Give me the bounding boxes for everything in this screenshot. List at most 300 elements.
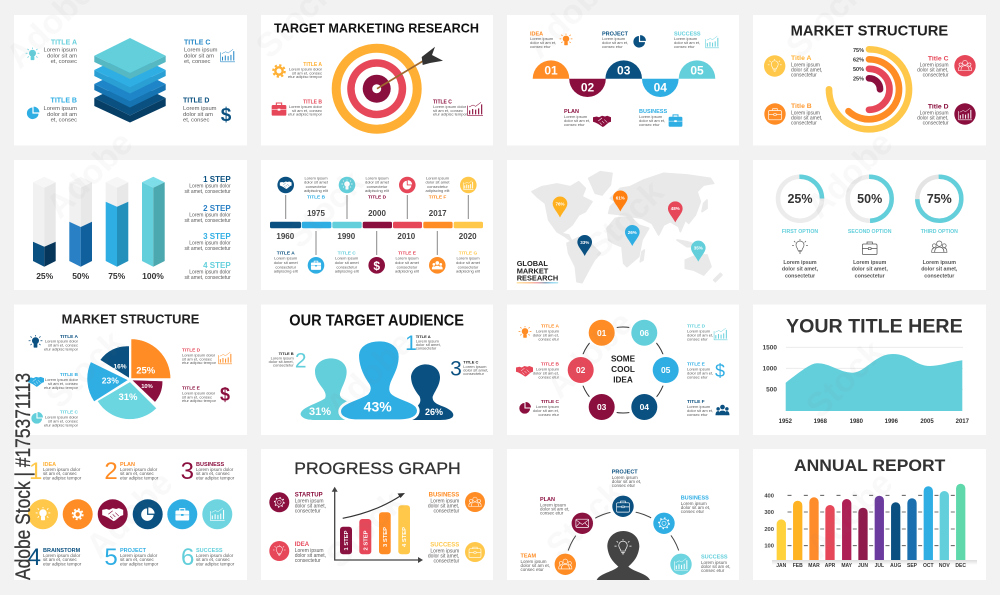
text: title G: Lorem ipsum <box>456 256 480 261</box>
step 4: 4 STEP <box>203 261 231 270</box>
text: title A: dolor sit amet <box>274 260 299 265</box>
panel: idea head arc <box>507 449 739 580</box>
cycle nodes: 06 <box>640 328 649 338</box>
label: team: dolor sit am et, <box>520 563 550 568</box>
label: business: consectetur <box>433 508 460 514</box>
label: idea: consectetur <box>295 558 321 564</box>
label: success: SUCCESS <box>430 542 459 548</box>
step 1 <box>185 175 231 195</box>
item 4 <box>28 544 82 571</box>
label: team <box>520 554 550 572</box>
label: title B <box>288 100 323 116</box>
text: title F <box>425 176 450 201</box>
y axis labels: 100 <box>764 544 774 550</box>
text: title A: TITLE A <box>277 251 295 257</box>
pie values: 23% <box>102 376 119 386</box>
text: title E: adipiscing elit <box>395 269 420 274</box>
label: title E <box>687 362 713 380</box>
isometric layer stack <box>94 38 166 122</box>
text: Stock <box>799 333 891 426</box>
label: title B: Lorem ipsum <box>791 110 820 116</box>
item 1: 1 <box>29 458 42 485</box>
text: title B: TITLE B <box>307 195 326 201</box>
label: title F: Lorem ipsum <box>687 404 711 409</box>
item 6 <box>181 544 235 571</box>
icon: chart <box>219 352 232 364</box>
label: title C: dolor sit am et, <box>533 408 559 413</box>
label: success: Lorem ipsum <box>701 560 727 565</box>
left labels: title A and B: TITLE B <box>51 98 77 104</box>
label: idea: IDEA <box>295 542 310 548</box>
icon: dollar: $ <box>715 361 725 381</box>
pie values: 31% <box>118 392 138 403</box>
label: title B: consec etur <box>538 374 560 380</box>
label: title A <box>791 55 822 78</box>
panel: percentage options <box>753 160 986 290</box>
icon: pie <box>633 35 646 48</box>
target rings <box>332 44 422 134</box>
icon circles top <box>277 177 477 193</box>
label: title D: Lorem ipsum <box>920 110 948 116</box>
panel: five-step wave <box>507 15 739 146</box>
text: Adobe <box>539 304 640 406</box>
left labels: title A and B: TITLE A <box>51 40 77 46</box>
left labels: title A and B <box>43 40 77 124</box>
panel: timeline <box>261 160 493 290</box>
label: business: dolor sit am et, <box>681 505 710 510</box>
step 3 <box>185 232 231 252</box>
donut 50% <box>848 177 892 221</box>
step 1: 1 STEP <box>203 175 231 184</box>
label: plan: consec etur <box>540 510 564 516</box>
panel: six numbered circles <box>14 449 247 580</box>
label: title B: consectetur <box>273 363 294 368</box>
percent labels <box>36 271 164 281</box>
label: title C: etur adipisc tempor <box>44 422 79 428</box>
label: success: Lorem ipsum <box>674 36 698 41</box>
item 1: Lorem ipsum dolor <box>43 467 81 472</box>
month labels: DEC <box>955 563 966 569</box>
label: business: dolor sit amet, <box>428 504 459 510</box>
label: success: consec etur <box>674 44 695 49</box>
donut 50%: 50% <box>857 192 882 206</box>
icon: gear <box>273 65 285 77</box>
label: business: Lorem ipsum <box>681 501 707 506</box>
label: title A: Title A <box>791 55 811 62</box>
text: Adobe <box>799 464 900 566</box>
connecting arc <box>565 511 682 565</box>
option descriptions: dolor sit amet, <box>852 267 888 273</box>
item 5: etur adipisc tempor <box>120 561 159 566</box>
bar: 75% <box>106 177 128 267</box>
option descriptions: dolor sit amet, <box>921 267 958 273</box>
label: title E: sit am et, consec <box>182 394 212 399</box>
pie values: 25% <box>136 366 156 376</box>
item 2 <box>104 458 159 485</box>
month labels <box>776 563 966 569</box>
label: title C: consectetur <box>463 371 485 376</box>
step 2: Lorem ipsum dolor <box>189 212 231 218</box>
option labels: FIRST OPTION <box>782 229 818 235</box>
item 6: SUCCESS <box>196 548 223 554</box>
label: business: Lorem ipsum <box>639 114 663 119</box>
label: title A: dolor sit am et, <box>533 332 559 338</box>
years: 2017 <box>429 209 447 218</box>
label: title C: etur adipisc tempor <box>433 112 468 116</box>
percent labels: 50% <box>72 271 90 281</box>
right labels: title C and D: Lorem ipsum <box>183 106 217 112</box>
label: title C: dolor sit amet, <box>463 368 488 372</box>
bar: 25% <box>33 177 56 267</box>
month labels: MAR <box>808 563 820 569</box>
icon: bulb <box>519 326 531 338</box>
item 3: sit am et, consec <box>196 471 231 476</box>
step bars <box>340 505 410 554</box>
label: title E: consec etur <box>687 374 708 380</box>
arrow in target <box>377 47 443 89</box>
label: project: PROJECT <box>602 31 629 37</box>
cycle nodes: 04 <box>640 402 649 412</box>
icon: dollar: $ <box>221 105 232 126</box>
pie values: 10% <box>141 384 153 390</box>
label: project: consec etur <box>612 483 635 488</box>
x axis labels: 1980 <box>850 419 864 425</box>
label: title C <box>533 399 560 417</box>
title: ANNUAL REPORT <box>794 457 945 475</box>
node: project <box>609 492 637 520</box>
years: 2010 <box>397 232 416 241</box>
panel: area chart <box>753 304 986 435</box>
text: title A: adipiscing elit <box>274 269 299 274</box>
step 2: 2 STEP <box>203 204 231 213</box>
numeral 3: 3 <box>450 358 462 380</box>
radial arcs <box>829 49 909 129</box>
label: success <box>428 542 460 564</box>
text: title F: adipiscing elit <box>425 188 450 193</box>
label: title D <box>917 104 949 126</box>
monthly bars <box>777 484 965 560</box>
label: title E <box>182 386 217 403</box>
label: title C: TITLE C <box>541 399 560 405</box>
text: Stock <box>39 323 131 416</box>
label: idea: consec etur <box>530 44 551 49</box>
panel: our target audience <box>261 304 493 435</box>
label: title A: sit am et, consec <box>292 70 322 75</box>
item 5: 5 <box>104 544 118 571</box>
label: success: consec etur <box>701 568 725 573</box>
bar: 50% <box>69 177 92 267</box>
item 1: sit am et, consec <box>43 471 78 476</box>
label: plan: Lorem ipsum <box>564 114 588 119</box>
axes <box>332 487 423 563</box>
label: success: consectetur <box>433 558 460 564</box>
map pins: 76% <box>555 201 565 206</box>
timeline bar <box>270 222 483 228</box>
title: OUR TARGET AUDIENCE <box>289 313 464 330</box>
step bars: 4 STEP <box>402 527 408 547</box>
label: business: BUSINESS <box>639 109 667 115</box>
label: title A: consectetur <box>791 72 817 78</box>
text: Adobe <box>79 464 180 566</box>
icon circles row <box>28 499 232 529</box>
icon: case circle <box>764 103 786 125</box>
label: title D: consec etur <box>687 336 708 342</box>
label: idea: dolor sit amet, <box>295 553 326 559</box>
bar: 100% <box>142 177 165 267</box>
label: title B <box>44 372 79 390</box>
label: plan: dolor sit am et, <box>540 506 570 512</box>
center label: IDEA <box>613 376 633 384</box>
cycle nodes: 01 <box>597 328 607 338</box>
label: success: SUCCESS <box>701 554 728 560</box>
audience percentages: 43% <box>364 398 392 414</box>
right labels: title C and D: TITLE C <box>184 40 210 46</box>
years: 1960 <box>276 232 295 241</box>
step 4 <box>185 261 231 281</box>
text: Stock <box>579 173 671 266</box>
step bars: 1 STEP <box>344 530 350 550</box>
text: title A: consectetur <box>275 264 297 269</box>
label: title F: consec etur <box>687 412 708 417</box>
label: title A: dolor sit amet, <box>791 68 822 74</box>
label: title C: Lorem ipsum <box>463 364 487 369</box>
icon: briefcase <box>272 103 286 116</box>
pie chart <box>87 339 171 419</box>
option descriptions: consectetur <box>785 273 815 279</box>
node: success <box>667 550 695 578</box>
label: success: SUCCESS <box>674 31 701 37</box>
text: title B <box>304 176 329 201</box>
y axis labels: 400 <box>764 493 774 499</box>
item 5: PROJECT <box>120 548 147 554</box>
item 3: etur adipisc tempor <box>196 475 235 480</box>
icon: pie <box>519 402 531 414</box>
growth arrow <box>343 493 405 518</box>
label: title B: sit am et, consec <box>292 108 322 113</box>
label: title E: etur adipisc tempor <box>182 398 217 403</box>
text: title D <box>365 176 390 201</box>
label: title A: Lorem ipsum <box>791 62 820 68</box>
text: title F: dolor sit amet <box>425 180 450 185</box>
label: title B: Lorem ipsum <box>271 355 294 360</box>
label: project: Lorem ipsum <box>602 36 626 41</box>
label: business: consec etur <box>639 122 660 127</box>
left labels: title A and B: Lorem ipsum <box>43 106 77 112</box>
node: team <box>551 550 579 578</box>
grid lines <box>786 347 963 389</box>
text: title D: adipiscing elit <box>365 188 390 193</box>
label: title F <box>687 399 713 417</box>
label: title B: Lorem ipsum dolor <box>45 377 79 382</box>
label: title C: consec etur <box>538 412 560 417</box>
text: title D: TITLE D <box>368 195 387 201</box>
text: title D: consectetur <box>367 184 388 189</box>
wave semicircles: 05 <box>690 64 704 78</box>
item 2: Lorem ipsum dolor <box>120 467 158 472</box>
icon: bulb outline <box>792 239 808 253</box>
center label: SOME <box>611 354 636 364</box>
right labels: title C and D: dolor sit am <box>184 53 214 59</box>
label: title D: Lorem ipsum <box>687 328 711 334</box>
item 2: etur adipisc tempor <box>120 475 159 480</box>
wave semicircles: 03 <box>617 64 631 78</box>
head silhouette <box>597 531 650 580</box>
month labels: NOV <box>939 563 950 569</box>
label: project: dolor sit am et, <box>612 479 641 484</box>
text: title E: dolor sit amet <box>395 260 420 265</box>
item 4: sit am et, consec <box>43 557 78 562</box>
text: title C: dolor sit amet <box>335 260 360 265</box>
label: title D <box>182 348 217 365</box>
label: title C <box>44 410 79 428</box>
text: title B: consectetur <box>306 184 327 189</box>
text: title F: consectetur <box>427 184 449 189</box>
wave semicircles: 04 <box>654 80 667 94</box>
item 3: BUSINESS <box>196 462 224 468</box>
label: title A <box>416 334 441 351</box>
left labels: title A and B: Lorem ipsum <box>43 48 77 54</box>
percent labels: 25% <box>36 271 54 281</box>
label: title A <box>533 324 560 342</box>
label: project: dolor sit am et, <box>602 40 628 45</box>
icon: chart <box>714 328 728 340</box>
icon: bulb circle <box>764 55 785 77</box>
cycle ring <box>580 327 666 413</box>
panel: stacked layers <box>14 15 247 146</box>
label: plan: PLAN <box>564 109 579 115</box>
label: title A: consec etur <box>538 336 560 342</box>
text: title A: Lorem ipsum <box>274 256 298 261</box>
text: title B: Lorem ipsum <box>304 176 328 180</box>
label: title B: etur adipisc tempor <box>44 385 79 390</box>
item 2: 2 <box>104 458 118 485</box>
label: title B: Title B <box>791 103 812 110</box>
item 4: BRAINSTORM <box>43 548 81 554</box>
option descriptions: Lorem ipsum <box>923 260 956 266</box>
label: title B <box>533 362 560 380</box>
option descriptions: Lorem ipsum <box>853 260 887 266</box>
label: startup: STARTUP <box>295 492 323 498</box>
pie values <box>102 364 156 403</box>
left labels: title A and B: et, consec <box>51 59 77 65</box>
label: plan: consec etur <box>564 122 585 127</box>
step 1: Lorem ipsum dolor <box>189 184 231 190</box>
label: idea: IDEA <box>530 31 543 37</box>
percent labels: 25% <box>853 77 864 83</box>
y axis labels: 200 <box>764 527 774 533</box>
icon: bulb <box>26 48 39 60</box>
audience silhouettes <box>301 340 453 421</box>
text: title E: TITLE E <box>398 251 417 257</box>
label: title B: consectetur <box>791 120 817 126</box>
years: 1975 <box>307 209 325 218</box>
right labels: title C and D: et, consec <box>184 59 211 65</box>
label: title E: Lorem ipsum <box>687 366 711 372</box>
label: title A: etur adipisc tempor <box>288 74 323 79</box>
text: title C <box>335 251 360 274</box>
panel: global market research map <box>507 160 739 290</box>
option descriptions: consectetur <box>924 273 954 279</box>
label: plan: dolor sit am et, <box>564 118 590 123</box>
label: title A: Lorem ipsum dolor <box>45 338 79 344</box>
map pins: 48% <box>671 206 680 211</box>
label: title A <box>44 334 79 352</box>
panel: 3D percent bars <box>14 160 247 290</box>
dashed gridlines <box>788 495 955 546</box>
label: project: PROJECT <box>612 470 638 476</box>
month labels: JUN <box>858 563 868 569</box>
x axis labels: 1952 <box>779 419 793 425</box>
icon circles bottom: $ <box>373 259 380 273</box>
label: business: Lorem ipsum <box>430 498 459 504</box>
y axis labels <box>763 344 777 394</box>
years <box>276 209 477 241</box>
icon: dollar: $ <box>220 384 230 404</box>
label: title B: TITLE B <box>60 372 79 378</box>
label: title A: sit am et, consec <box>48 342 78 348</box>
label: title B: TITLE B <box>541 362 560 368</box>
text: title B: adipiscing elit <box>304 188 329 193</box>
label: title C: consectetur <box>923 72 949 78</box>
panel: annual report <box>753 449 986 580</box>
step 1: sit amet, consectetur <box>185 189 231 195</box>
text: title G <box>456 251 481 274</box>
label: team: TEAM <box>520 554 536 560</box>
label: title C: TITLE C <box>433 100 452 106</box>
label: title A: Lorem ipsum <box>416 338 439 343</box>
step bars: 2 STEP <box>363 530 369 550</box>
title: YOUR TITLE HERE <box>786 317 963 338</box>
left labels: title A and B: dolor sit am <box>47 112 77 118</box>
item 5 <box>104 544 159 571</box>
label: title C: Title C <box>928 56 949 62</box>
option labels: SECOND OPTION <box>848 229 892 235</box>
text: title F: TITLE F <box>429 195 446 201</box>
left labels: title A and B: dolor sit am <box>47 53 77 59</box>
text: title C: TITLE C <box>338 251 356 257</box>
month labels: APR <box>825 563 836 569</box>
step 3: 3 STEP <box>203 232 231 241</box>
label: title D: sit am et, consec <box>182 356 212 361</box>
years: 1990 <box>337 232 356 241</box>
text: title E: consectetur <box>397 264 418 269</box>
label: title A <box>288 62 323 79</box>
label: title A: Lorem ipsum dolor <box>289 66 323 72</box>
month labels: JUL <box>875 563 884 569</box>
label: title B: Lorem ipsum dolor <box>289 104 323 109</box>
label: title C <box>433 100 468 116</box>
panel: target marketing research <box>261 15 493 146</box>
icon: gear circle <box>269 492 289 512</box>
y axis labels: 500 <box>766 386 777 394</box>
numeral 1: 1 <box>405 332 417 355</box>
right labels: title C and D: Lorem ipsum <box>184 48 218 54</box>
option descriptions: Lorem ipsum <box>783 260 817 266</box>
x axis labels: 2017 <box>956 419 970 425</box>
y axis labels: 1500 <box>763 344 777 352</box>
month labels: OCT <box>923 563 934 569</box>
floor shadow <box>772 560 977 565</box>
y axis labels <box>764 493 774 550</box>
heading: MARKET <box>517 266 549 275</box>
item 6: Lorem ipsum dolor <box>196 553 234 558</box>
map pins: 61% <box>616 195 625 200</box>
label: success <box>674 31 701 49</box>
wave semicircles: 02 <box>581 80 594 94</box>
heading: GLOBAL <box>517 259 548 268</box>
map pins: 26% <box>628 230 637 235</box>
label: title D: TITLE D <box>687 324 706 330</box>
